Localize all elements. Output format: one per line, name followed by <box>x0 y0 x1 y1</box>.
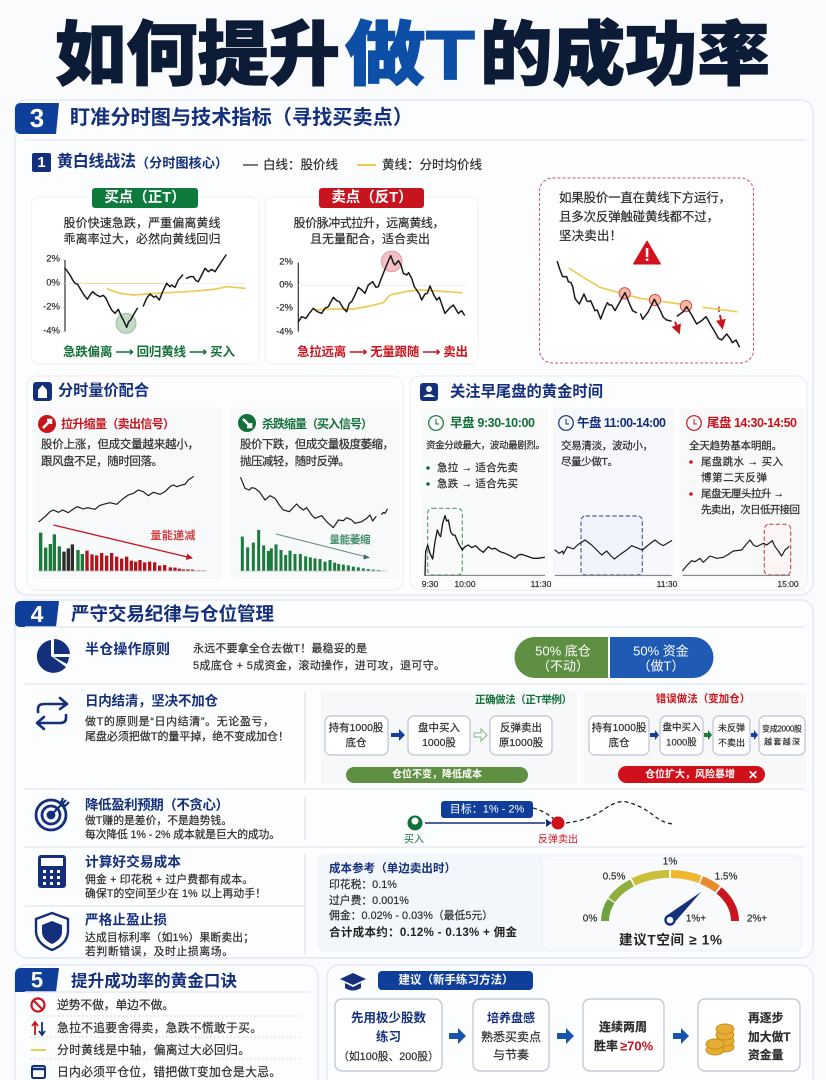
buy point badge: 买点（正T） <box>104 188 186 206</box>
subheading: yellow white line tactic with legend: 白线：股价线 <box>263 157 338 172</box>
tip 3: 分时黄线是中轴，偏离过大必回归。 <box>57 1043 250 1057</box>
column: morning: 早盘 9:30-10:00 <box>450 415 535 430</box>
advice badge: 建议（新手练习方法） <box>398 972 514 986</box>
buy point chart: 2% <box>46 254 61 264</box>
subheading: yellow white line tactic with legend <box>32 152 482 172</box>
column: midday: 交易清淡，波动小， <box>561 439 653 452</box>
falling price line and shrinking volume bars <box>239 478 387 571</box>
position split pill: （不动） <box>537 658 589 674</box>
target diagram: 买入 <box>404 834 424 846</box>
column: closing: 全天趋势基本明朗。 <box>689 439 782 452</box>
row: stop profit and loss: 严格止盈止损 <box>85 912 168 928</box>
panel: sell point <box>265 188 478 364</box>
buy point flow: 急跌偏离 ⟶ 回归黄线 ⟶ 买入 <box>63 344 235 359</box>
section 3 heading: 3 <box>30 103 44 133</box>
row: intraday settle: 做T的原则是“日内结清”。无论盈亏， <box>85 714 274 728</box>
warning text: 且多次反弹触碰黄线都不过， <box>559 210 719 224</box>
step 1 <box>335 999 442 1071</box>
cost reference: 合计成本约：0.12% - 0.13% + 佣金 <box>329 925 518 939</box>
panel: volume price <box>27 376 403 590</box>
step 2 <box>473 999 549 1071</box>
panel: cost reference and gauge <box>317 854 803 952</box>
icon: coins <box>706 1024 734 1055</box>
wrong practice flow: 持有1000股 <box>592 721 647 734</box>
section 4 heading <box>15 601 805 627</box>
column: morning: 11:30 <box>531 579 552 589</box>
step 3: ≥70% <box>620 1038 654 1054</box>
card: falling shrink volume <box>230 407 400 579</box>
panel: section 4 <box>15 600 813 958</box>
column: closing: 先卖出，次日低开接回 <box>701 503 800 516</box>
buy point chart: 0% <box>46 278 61 288</box>
subheading: yellow white line tactic with legend: 黄线：分时均价线 <box>382 158 482 172</box>
step 2: 与节奏 <box>493 1048 529 1062</box>
position split pill: （做T） <box>638 658 684 674</box>
wrong practice flow: 1000股 <box>666 738 697 748</box>
column: closing: 15:00 <box>777 579 799 589</box>
volume price heading <box>33 382 149 401</box>
step 4 <box>698 999 800 1071</box>
step 3 <box>583 999 664 1071</box>
tip 2: 急拉不追要舍得卖，急跌不慌敢于买。 <box>57 1021 262 1035</box>
row: intraday settle <box>37 692 806 784</box>
buy point badge <box>92 188 198 208</box>
step 4: 加大做T <box>748 1030 791 1044</box>
row: half position principle: 半仓操作原则 <box>85 641 170 657</box>
row: half position principle <box>37 637 713 678</box>
position split pill <box>514 637 714 678</box>
column: morning: 急拉 → 适合先卖 <box>437 461 518 474</box>
column: morning: 10:00 <box>454 579 476 589</box>
cost reference <box>329 861 518 939</box>
cost reference: 印花税：0.1% <box>329 877 397 891</box>
row: intraday settle: 尾盘必须把做T的量平掉，绝不变成加仓！ <box>85 729 289 743</box>
arrow <box>673 1028 689 1044</box>
gauge: 0% <box>583 914 597 924</box>
buy point chart: -2% <box>43 302 61 312</box>
panel: section 3 <box>15 100 813 595</box>
arrow <box>449 1028 466 1044</box>
buy point chart: -4% <box>43 326 61 336</box>
advice badge <box>378 971 533 990</box>
title: 做T <box>345 16 475 94</box>
column: closing: 尾盘无厘头拉升 → <box>701 487 784 500</box>
correct practice flow: 盘中买入 <box>418 721 460 734</box>
subheading: yellow white line tactic with legend: （分时图核心） <box>136 156 228 170</box>
warning text: 坚决卖出！ <box>559 229 622 243</box>
row: intraday settle: 日内结清，坚决不加仓 <box>85 692 218 708</box>
icon: pie chart <box>37 639 70 673</box>
wrong practice flow: 变成2000股 <box>762 724 802 734</box>
subheading: yellow white line tactic with legend: 1 <box>37 154 46 171</box>
section 5 heading <box>15 968 310 992</box>
section 3 heading <box>15 103 805 140</box>
row: stop profit and loss: 达成目标利率（如1%）果断卖出； <box>85 930 254 944</box>
gauge: 2%+ <box>747 914 767 924</box>
row: lower profit expectation: 降低盈利预期（不贪心） <box>85 796 229 812</box>
row: stop profit and loss: 若判断错误，及时止损离场。 <box>85 944 233 958</box>
step 2: 培养盘感 <box>487 1010 535 1025</box>
row: lower profit expectation <box>36 796 675 846</box>
tip 4: 日内必须平仓位，错把做T变加仓是大忌。 <box>57 1065 281 1079</box>
warning text: 如果股价一直在黄线下方运行， <box>559 190 731 205</box>
tip 1: 逆势不做，单边不做。 <box>57 998 174 1012</box>
column: morning: 资金分歧最大，波动最剧烈。 <box>426 440 545 452</box>
icon: red circle <box>38 415 56 433</box>
target diagram <box>404 801 675 846</box>
step 1: （如100股、200股） <box>338 1049 439 1063</box>
card: rising shrink volume: 拉升缩量（卖出信号） <box>61 416 175 431</box>
row: trading cost <box>38 854 266 900</box>
correct practice flow: 仓位不变，降低成本 <box>392 768 482 780</box>
sell point chart: 0% <box>279 280 294 290</box>
step 4: 再逐步 <box>748 1011 784 1025</box>
sell point chart: -2% <box>276 302 294 314</box>
correct practice flow: 持有1000股 <box>329 721 384 734</box>
title <box>55 16 770 94</box>
subheading: yellow white line tactic with legend: 黄白线战法 <box>57 152 136 170</box>
gauge: 建议T空间 ≥ 1% <box>619 932 722 948</box>
section 4 heading: 4 <box>31 601 44 627</box>
correct practice flow: 原1000股 <box>499 737 544 749</box>
column: morning <box>421 408 552 589</box>
sell point flow: 急拉远离 ⟶ 无量跟随 ⟶ 卖出 <box>297 344 468 359</box>
column: midday: 午盘 11:00-14:00 <box>577 415 666 430</box>
sell point description: 且无量配合，适合卖出 <box>310 231 430 246</box>
column: midday: 11:30 <box>657 579 678 589</box>
section 5 heading: 提升成功率的黄金口诀 <box>71 970 237 990</box>
row: lower profit expectation: 每次降低 1% - 2% 成本就是巨大的成功。 <box>85 827 280 841</box>
arrow <box>557 1028 574 1044</box>
rising price line and fading volume bars <box>38 477 207 571</box>
target diagram: 目标：1% - 2% <box>450 802 525 816</box>
closing chart <box>683 524 791 575</box>
wrong practice flow <box>584 692 806 784</box>
morning chart <box>424 508 545 575</box>
correct practice flow: 正确做法（正T举例） <box>475 693 572 706</box>
step 1: 练习 <box>376 1029 401 1044</box>
sell point chart: -4% <box>276 326 294 338</box>
wrong practice flow: 越套越深 <box>764 736 800 746</box>
panel: golden tips <box>15 965 318 1080</box>
sell point chart <box>276 251 467 338</box>
gauge <box>543 856 800 949</box>
wrong practice flow: 错误做法（变加仓） <box>656 692 750 705</box>
column: closing: 尾盘跳水 → 买入 <box>701 455 784 468</box>
gauge: 1%+ <box>686 914 706 924</box>
section 4 heading: 严守交易纪律与仓位管理 <box>71 604 274 624</box>
row: lower profit expectation: 做T赚的是差价，不是趋势钱。 <box>85 813 232 827</box>
correct practice flow: 反弹卖出 <box>500 721 542 734</box>
sell point description <box>294 215 444 246</box>
title: 如何提升 <box>55 16 340 94</box>
cost reference: 成本参考（单边卖出时） <box>329 861 456 875</box>
column: closing <box>680 408 804 589</box>
icon: calculator <box>38 855 66 888</box>
wrong practice flow: 仓位扩大，风险暴增 <box>645 768 735 780</box>
buy point description: 乖离率过大，必然向黄线回归 <box>64 231 220 246</box>
callout: below yellow line warning <box>540 178 754 363</box>
column: morning: 急跌 → 适合先买 <box>437 477 518 490</box>
panel: buy point <box>31 188 259 364</box>
gauge: 1% <box>663 856 677 868</box>
icon: shield <box>36 913 68 950</box>
step 1: 先用极少股数 <box>351 1010 426 1025</box>
column: closing: 博第二天反弹 <box>701 471 768 484</box>
target diagram: 反弹卖出 <box>538 832 578 846</box>
sell point badge <box>319 188 424 208</box>
title: 的成功率 <box>480 16 770 94</box>
column: morning: 9:30 <box>422 579 439 589</box>
card: rising shrink volume: 股价上涨，但成交量越来越小， <box>41 437 199 451</box>
golden time heading: 关注早尾盘的黄金时间 <box>450 382 603 400</box>
midday chart <box>555 516 672 575</box>
correct practice flow: 底仓 <box>346 736 367 749</box>
row: trading cost: 确保T的空间至少在 1% 以上再动手！ <box>85 886 266 900</box>
position split pill: 50% 底仓 <box>535 644 591 658</box>
row: trading cost: 佣金 + 印花税 + 过户费都有成本。 <box>85 872 253 886</box>
wrong practice flow: 盘中买入 <box>662 722 701 734</box>
correct practice flow: 1000股 <box>422 737 456 749</box>
cost reference: 佣金：0.02% - 0.03%（最低5元） <box>329 908 493 922</box>
section 3 heading: 盯准分时图与技术指标（寻找买卖点） <box>70 106 413 129</box>
sell point description: 股价脉冲式拉升，远离黄线， <box>294 215 444 230</box>
wrong practice flow: 未反弹 <box>718 722 745 733</box>
icon: graduation cap <box>340 973 366 990</box>
buy point chart <box>43 254 245 336</box>
position split pill: 50% 资金 <box>633 644 689 658</box>
wrong practice flow: ✕ <box>748 768 758 782</box>
card: falling shrink volume: 抛压减轻，随时反弹。 <box>240 454 350 468</box>
step 3: 胜率 <box>594 1038 618 1053</box>
icon: swap arrows <box>37 698 67 729</box>
gauge: 0.5% <box>603 872 626 882</box>
step 4: 资金量 <box>748 1048 784 1062</box>
card: rising shrink volume: 量能递减 <box>150 528 196 542</box>
row: half position principle: 永远不要拿全仓去做T！最稳妥的是 <box>193 641 367 655</box>
sell point chart: 2% <box>279 256 294 268</box>
panel: beginner practice <box>327 965 813 1080</box>
icon: green circle <box>238 414 256 432</box>
column: midday: 尽量少做T。 <box>561 455 618 468</box>
correct practice flow <box>321 692 577 784</box>
step 2: 熟悉买卖点 <box>481 1029 541 1044</box>
section 5 heading: 5 <box>31 968 43 992</box>
card: rising shrink volume: 跟风盘不足，随时回落。 <box>41 454 163 468</box>
step 3: 连续两周 <box>599 1019 647 1034</box>
row: trading cost: 计算好交易成本 <box>85 854 181 870</box>
column: closing: 尾盘 14:30-14:50 <box>707 415 797 430</box>
icon: warning triangle <box>634 241 660 264</box>
buy point description: 股价快速急跌，严重偏离黄线 <box>64 215 220 230</box>
wrong practice flow: 不卖出 <box>718 737 745 748</box>
volume price heading: 分时量价配合 <box>58 382 149 400</box>
column: midday <box>553 408 678 589</box>
icon: target <box>36 798 69 830</box>
wrong practice flow: 底仓 <box>608 736 630 749</box>
card: rising shrink volume <box>33 407 222 579</box>
warning text <box>559 190 731 243</box>
row: stop profit and loss <box>36 912 254 958</box>
panel: golden time <box>410 376 807 590</box>
downtrend chart <box>557 262 739 347</box>
card: falling shrink volume: 杀跌缩量（买入信号） <box>262 416 373 431</box>
gauge: 1.5% <box>715 872 738 882</box>
row: half position principle: 5成底仓 + 5成资金，滚动操作，进可攻，退可守。 <box>193 658 445 672</box>
cost reference: 过户费：0.001% <box>329 893 409 907</box>
gauge needle <box>666 892 701 924</box>
card: falling shrink volume: 量能萎缩 <box>330 533 371 546</box>
buy point description <box>64 215 220 246</box>
card: falling shrink volume: 股价下跌，但成交量极度萎缩， <box>240 437 394 451</box>
sell point badge: 卖点（反T） <box>331 188 413 206</box>
